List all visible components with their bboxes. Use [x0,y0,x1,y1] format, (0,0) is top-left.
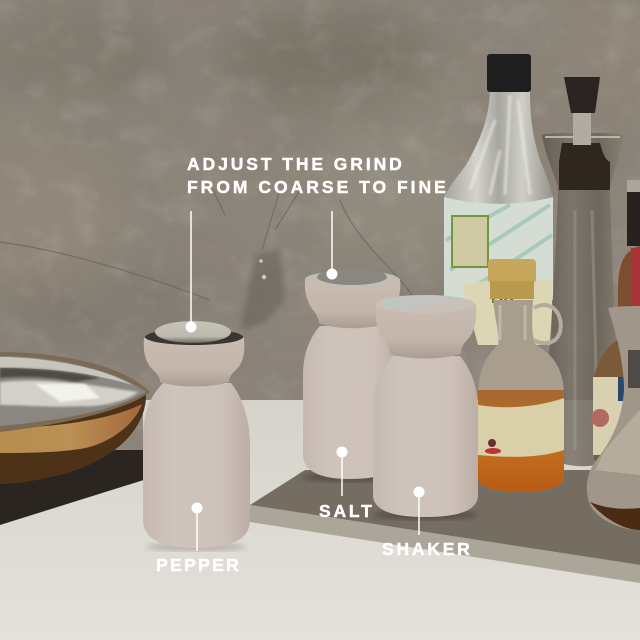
salt grinder shadow [302,472,398,482]
shaker shadow [373,510,477,520]
heading: ADJUST THE GRIND [187,154,403,174]
pepper collar [144,332,244,386]
pan [0,352,150,484]
shaker [373,295,478,520]
shaker body [373,356,478,517]
black cooktop [0,450,150,525]
paper wrap [444,197,553,300]
cap [487,54,531,92]
callout: pepper [156,502,240,575]
metal stem [573,113,591,145]
amber bottle with labels [591,335,640,470]
shaker top [376,295,474,313]
callout: salt: SALT [319,501,373,521]
callout: shaker [382,486,471,559]
heading [187,154,447,197]
handle [534,305,561,343]
bottle: foil-wrapped olive oil: BR [491,288,516,307]
salt lid [305,269,399,287]
callout: pepper lid pointer [186,211,196,332]
dark bottle at far right [618,180,640,330]
background: marble wall [0,0,640,480]
stone slab [250,470,640,583]
pepper grinder [143,321,250,551]
gold cap [488,259,536,283]
foil shoulder [444,90,553,300]
green label [452,216,488,267]
oil [478,390,564,492]
glass body [478,300,564,492]
pan underside [0,395,146,484]
salt grinder [302,269,400,482]
callout: salt lid pointer [326,211,338,280]
copper band [0,404,142,453]
heading: FROM COARSE TO FINE [187,177,447,197]
callout: salt [319,446,373,521]
oil jar [478,259,564,492]
pan rim and interior [0,352,150,432]
pepper body [143,383,250,548]
small glass carafe [587,306,640,530]
stopper [564,77,600,113]
callout: pepper: PEPPER [156,555,240,575]
salt collar [305,273,400,328]
pepper shadow [146,543,246,551]
glass [542,133,623,466]
callout: shaker: SHAKER [382,539,471,559]
bottle: foil-wrapped olive oil [444,54,553,345]
dark liquid band [559,143,610,190]
carafe with dark pourer [542,77,623,466]
label [478,398,564,457]
shaker collar [376,296,476,358]
salt body [303,326,398,479]
pepper lid [145,321,243,345]
countertop [0,400,640,640]
brand lettering [462,280,552,345]
olive illustration [485,439,501,454]
